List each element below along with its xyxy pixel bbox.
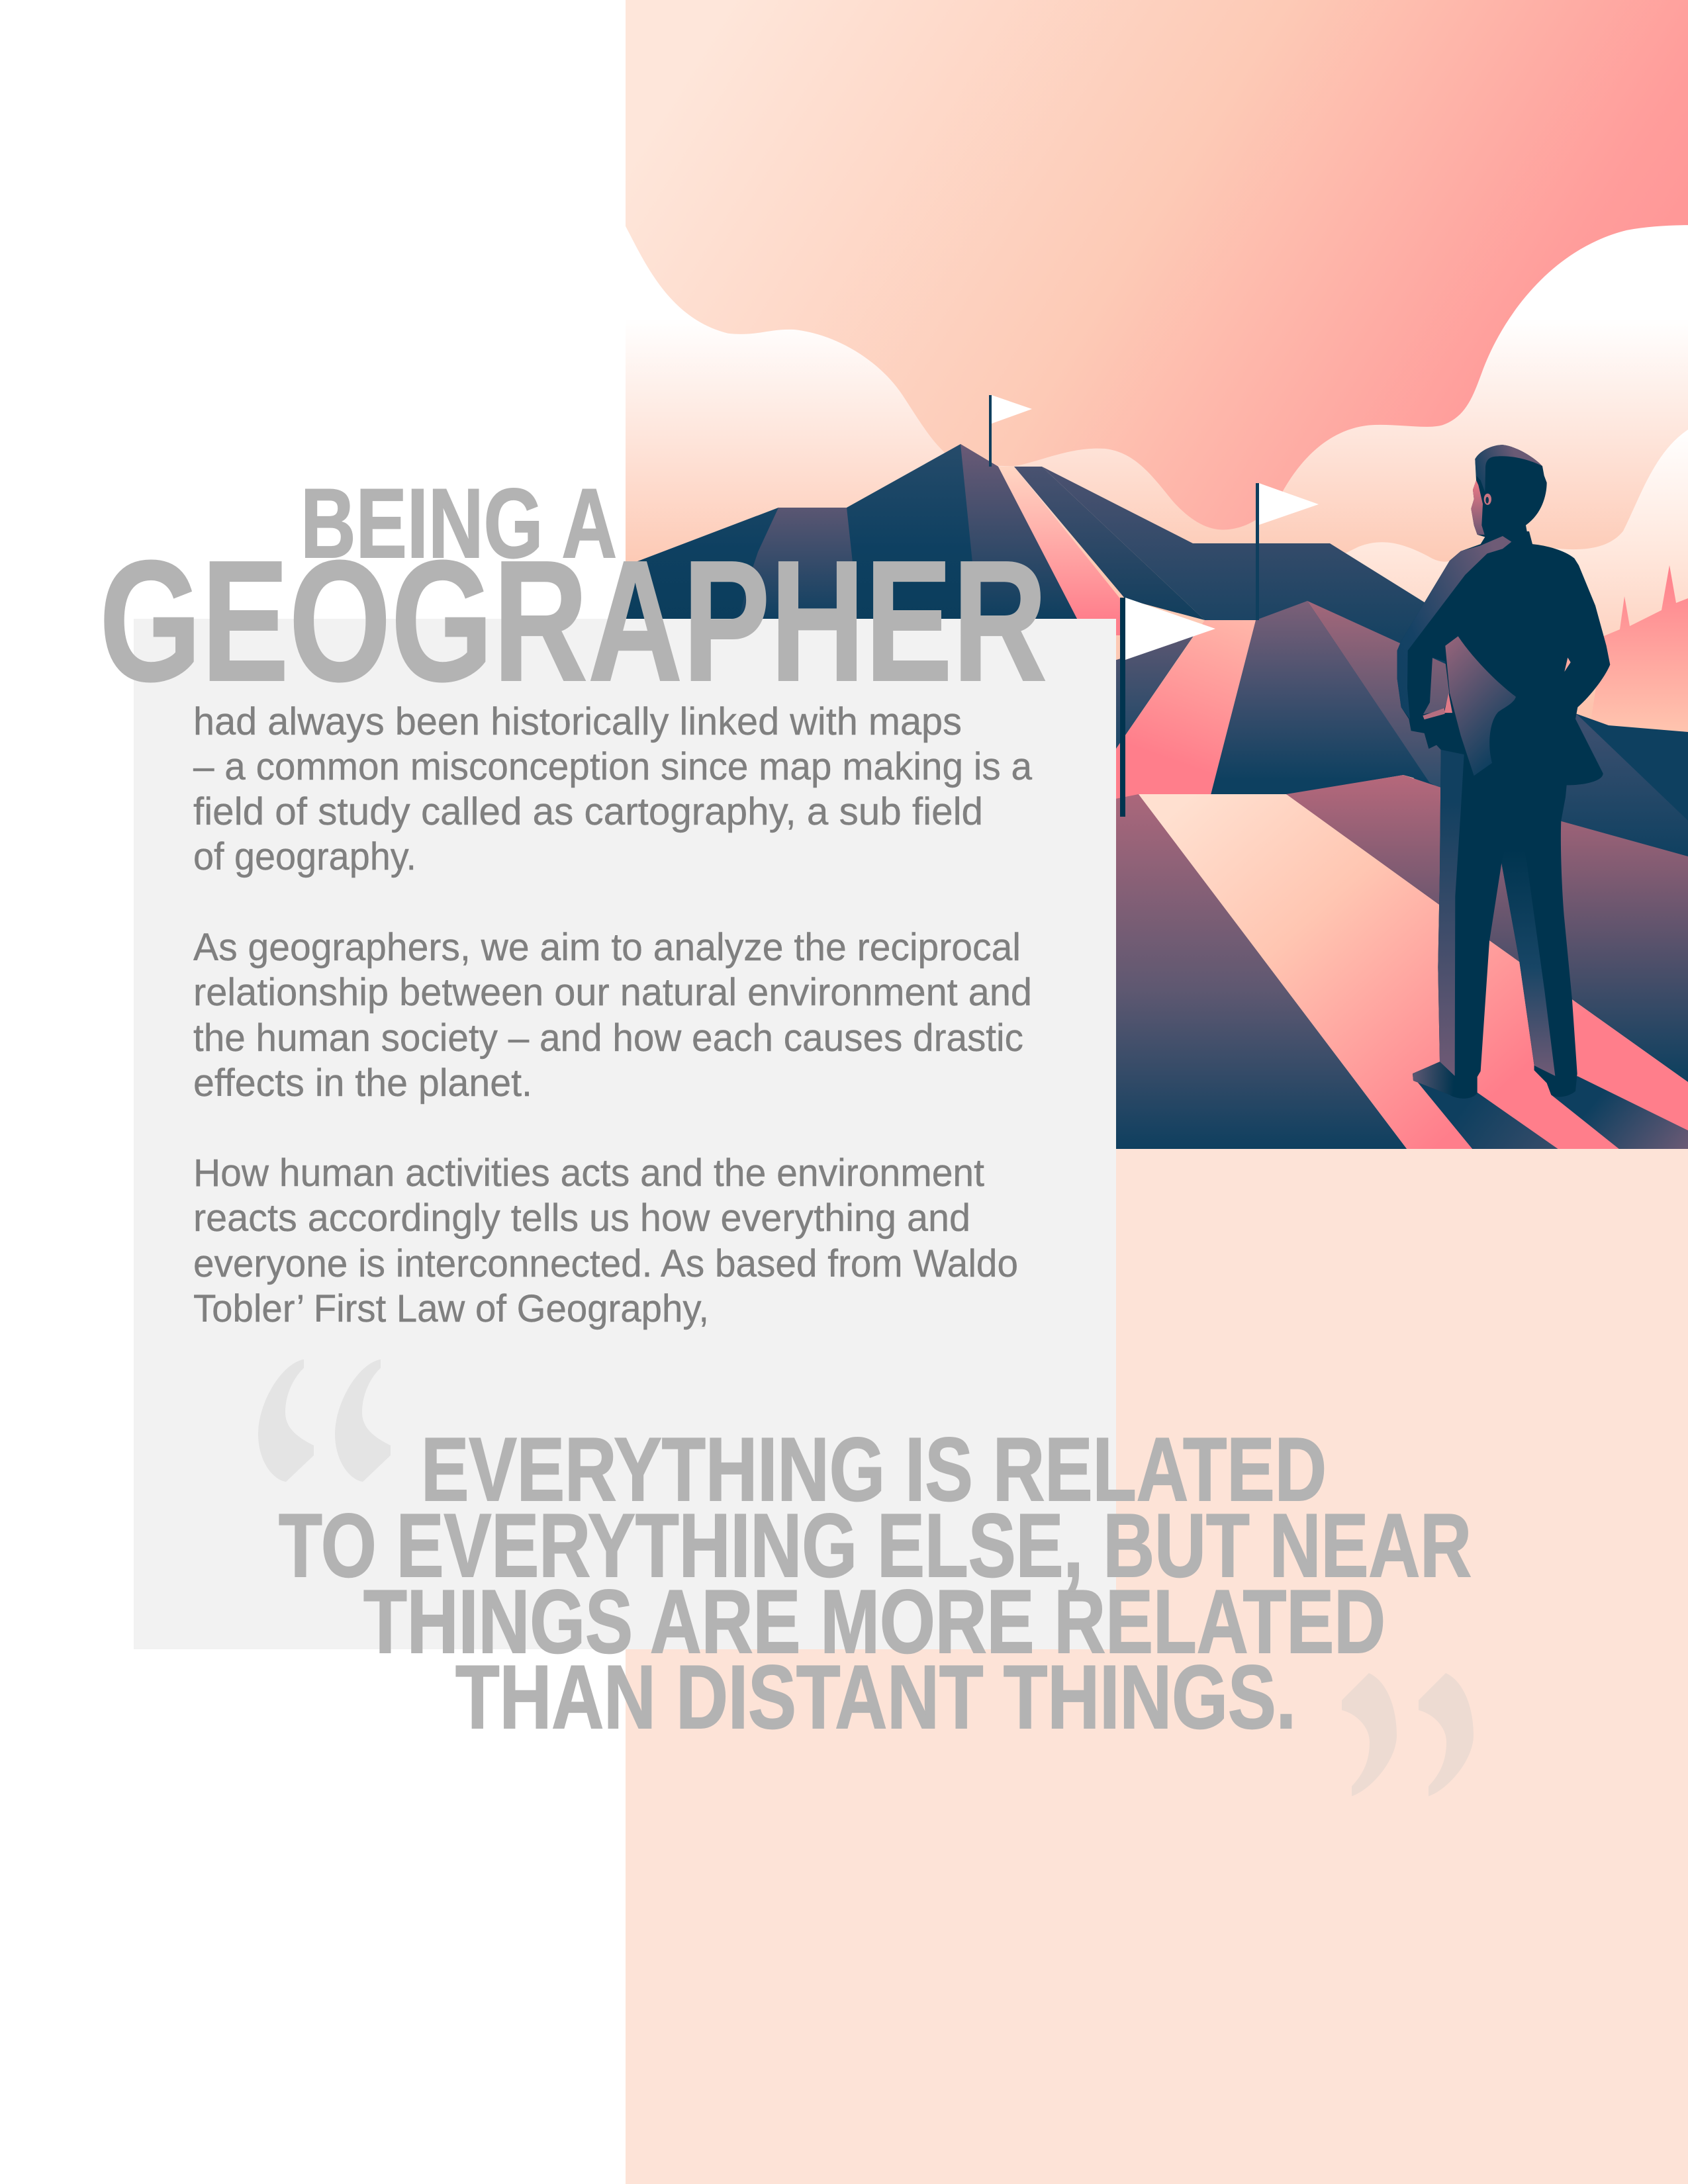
- body paragraph 2: relationship between our natural environment and: [193, 971, 1032, 1014]
- far pink road: [998, 467, 1125, 635]
- purple ground right: [1286, 775, 1688, 1082]
- body paragraph 1: – a common misconception since map making is a: [193, 745, 1033, 788]
- title: [99, 468, 1047, 717]
- shadow of left foot: [1413, 1076, 1559, 1150]
- dark slope beside the road: [1112, 636, 1194, 754]
- near pink road: [1112, 620, 1256, 801]
- lit jacket flap: [1445, 636, 1516, 776]
- lit right shoe: [1534, 1066, 1551, 1095]
- sky: [626, 0, 1688, 1149]
- geographer figure: [1397, 445, 1610, 1099]
- icon: closing quotation mark: [1342, 1673, 1474, 1796]
- quote: first law of geography: THAN DISTANT THINGS.: [455, 1647, 1296, 1747]
- text panel: light grey: [134, 619, 1116, 1649]
- right navy slope: [1542, 702, 1688, 860]
- body paragraph 2: effects in the planet.: [193, 1062, 532, 1105]
- body paragraph 3: [193, 1152, 1018, 1330]
- body paragraph 1: field of study called as cartography, a sub field: [193, 790, 983, 833]
- pink hills with spires: [1593, 565, 1688, 711]
- near cloud layer: [1345, 430, 1688, 637]
- flag on ridge: [1256, 483, 1319, 620]
- lit right leg: [1501, 801, 1555, 1076]
- far navy ridge: [1014, 467, 1688, 821]
- background panel: peach: [626, 0, 1688, 2184]
- central purple mountain: [1211, 601, 1450, 795]
- body paragraph 3: everyone is interconnected. As based from Waldo: [193, 1242, 1018, 1285]
- illustration: geographer overlooking mountains: [625, 0, 1688, 1150]
- purple ground left: [1112, 794, 1407, 1150]
- body paragraph 3: Tobler’ First Law of Geography,: [193, 1287, 709, 1330]
- body silhouette: [1397, 445, 1610, 1099]
- body paragraph 1: [193, 700, 1033, 878]
- face: [1471, 480, 1485, 535]
- lit hair: [1475, 445, 1542, 492]
- lit left leg: [1438, 750, 1464, 1076]
- icon: opening quotation mark: [258, 1359, 391, 1482]
- ear: [1482, 490, 1493, 508]
- lit left shoe: [1413, 1062, 1455, 1095]
- body paragraph 1: had always been historically linked with maps: [193, 700, 962, 743]
- gap at right elbow: [1564, 658, 1571, 672]
- quote: first law of geography: THINGS ARE MORE RELATED: [363, 1571, 1385, 1672]
- body paragraph 2: the human society – and how each causes drastic: [193, 1017, 1023, 1060]
- flag in foreground: [1120, 598, 1215, 817]
- flag on summit: [989, 395, 1032, 467]
- quote: first law of geography: EVERYTHING IS RELATED: [421, 1419, 1327, 1520]
- foreground peach road: [1139, 794, 1688, 1150]
- body paragraph 3: reacts accordingly tells us how everything and: [193, 1197, 970, 1240]
- title line: geographer: GEOGRAPHER: [99, 525, 1047, 717]
- pink cuff: [1423, 708, 1445, 719]
- pink gap under arm: [1444, 693, 1452, 713]
- left navy mountain: [626, 444, 1086, 622]
- shadow of right foot: [1551, 1076, 1688, 1150]
- far cloud layer: [625, 225, 1688, 1148]
- body paragraph 2: As geographers, we aim to analyze the reciprocal: [193, 926, 1021, 969]
- title line: being a: BEING A: [301, 468, 617, 578]
- body paragraph 2: [193, 926, 1032, 1105]
- quote: first law of geography: [279, 1419, 1472, 1747]
- body paragraph 3: How human activities acts and the environment: [193, 1152, 984, 1195]
- body paragraph 1: of geography.: [193, 835, 416, 878]
- lit sleeve: [1397, 536, 1511, 719]
